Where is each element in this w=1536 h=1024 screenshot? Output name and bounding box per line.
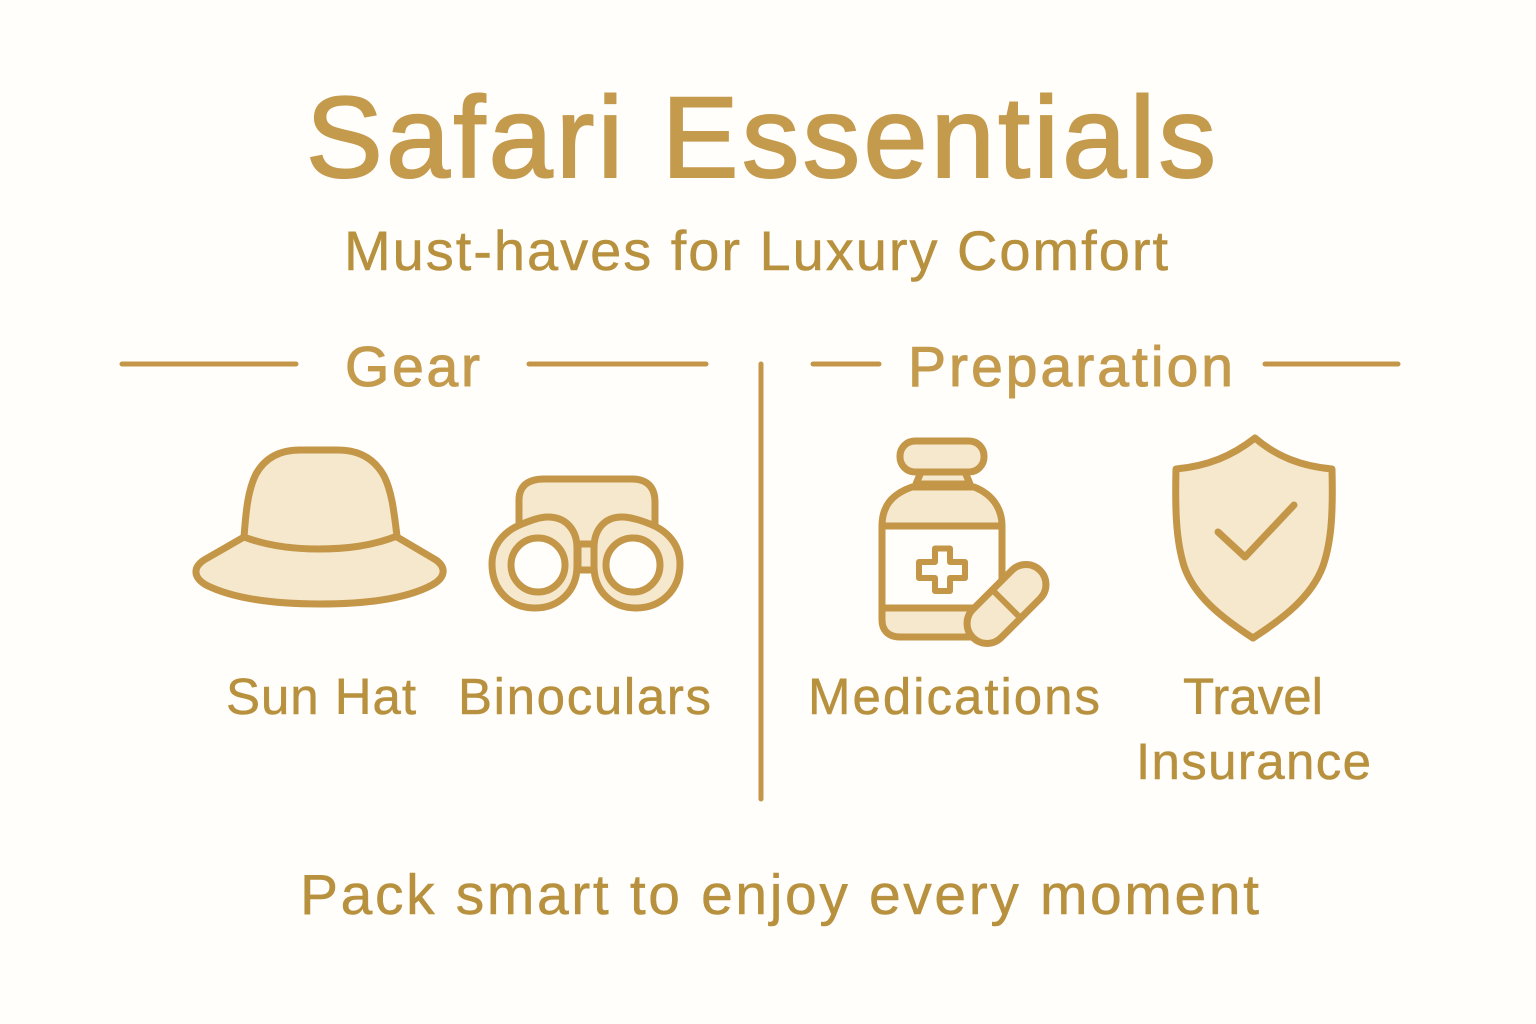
- heading: preparation: Preparation: [908, 335, 1233, 399]
- label: travel insurance: Insurance: [1136, 733, 1371, 790]
- subtitle: Must-haves for Luxury Comfort: [344, 219, 1168, 282]
- footer tagline: Pack smart to enjoy every moment: [300, 863, 1259, 927]
- title: Safari Essentials: [306, 74, 1216, 202]
- label: travel insurance: [1136, 668, 1371, 790]
- label: travel insurance: Travel: [1183, 668, 1323, 725]
- icon: medication bottle and pill: [882, 441, 1054, 652]
- icon: shield with check: [1176, 438, 1332, 638]
- icon: binoculars: [492, 479, 680, 608]
- icon: sun hat: [196, 450, 443, 604]
- label: binoculars: Binoculars: [458, 668, 711, 725]
- divider: [758, 364, 764, 799]
- label: sun hat: Sun Hat: [226, 668, 416, 725]
- label: medications: Medications: [808, 668, 1100, 725]
- panel: gear: [122, 335, 711, 725]
- heading: gear: Gear: [345, 335, 480, 399]
- panel: preparation: [808, 335, 1398, 790]
